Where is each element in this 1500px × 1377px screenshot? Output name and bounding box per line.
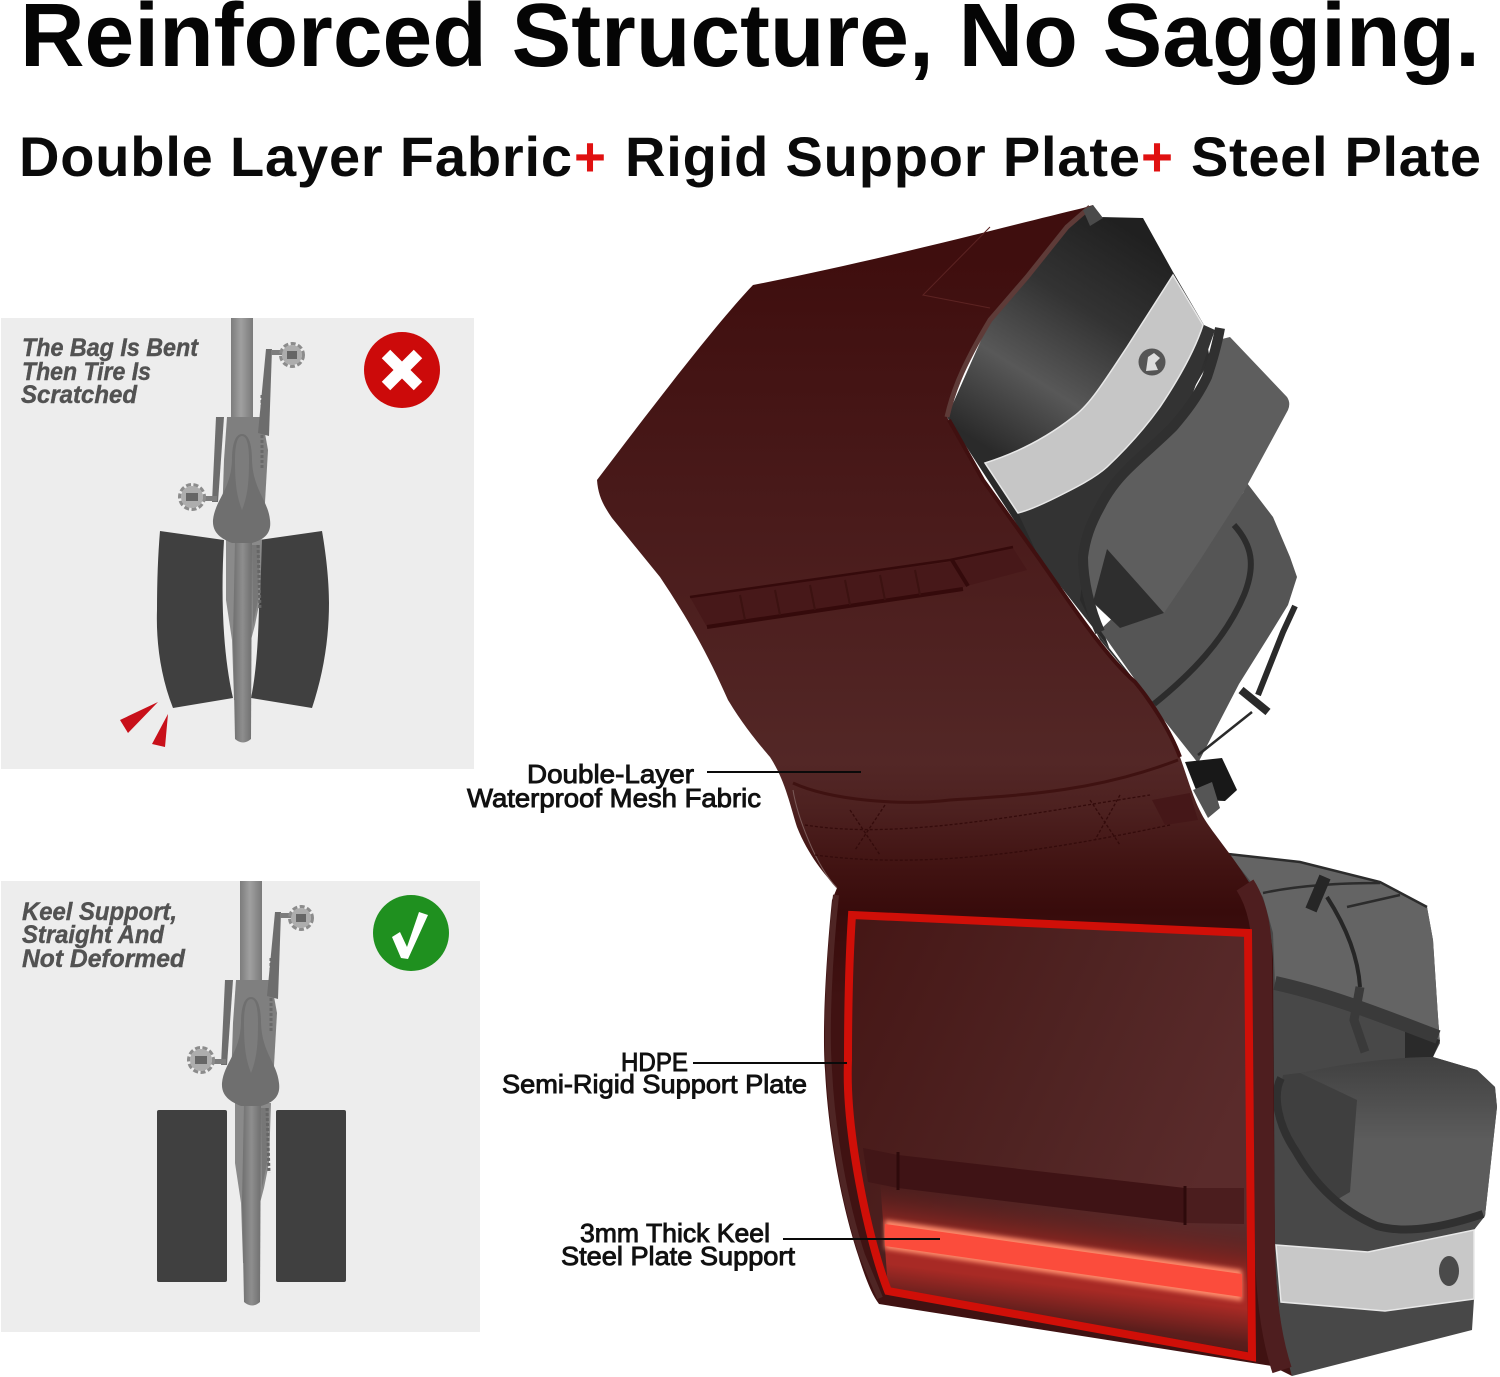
fold tab — [1152, 793, 1198, 825]
drawcord — [1311, 877, 1365, 1052]
pocket piping — [1277, 1078, 1483, 1229]
icon: green check — [373, 895, 449, 971]
caption: keel support: Not Deformed — [22, 945, 186, 973]
buckle and strap — [1185, 758, 1237, 818]
caption: the bag is bent: The Bag Is Bent — [22, 334, 200, 362]
callout: keel steel plate — [561, 1218, 940, 1271]
curved zipper — [1154, 525, 1251, 704]
fold edge highlight — [793, 790, 837, 888]
subtitle: + — [1141, 125, 1173, 188]
lower bag body — [1228, 853, 1497, 1376]
side pocket flap — [1083, 337, 1289, 628]
upper compartment — [1228, 853, 1440, 1043]
steel plate bar — [885, 1220, 1242, 1301]
subtitle: Double Layer Fabric — [19, 125, 572, 188]
callout: double-layer mesh fabric: Double-Layer — [527, 759, 694, 789]
bent pannier bags — [157, 531, 329, 708]
open flap silhouette — [597, 205, 1292, 1376]
reflective strip — [1276, 1230, 1474, 1311]
caption: keel support: Straight And — [22, 921, 165, 949]
callout: HDPE support plate — [502, 1047, 847, 1099]
subtitle: Steel Plate — [1191, 125, 1481, 188]
shadow under band — [1405, 1028, 1440, 1058]
panel: keel support (correct) — [1, 881, 480, 1332]
elastic band — [1275, 983, 1438, 1037]
callout: double-layer mesh fabric: Waterproof Mesh Fabric — [467, 783, 761, 813]
caption: the bag is bent — [21, 334, 200, 409]
front pocket — [1278, 1057, 1497, 1226]
inside of support plate — [848, 915, 1252, 1352]
top seams — [1228, 854, 1427, 907]
bicycle rear view — [180, 318, 304, 742]
flap edge binding — [947, 207, 1090, 417]
grey corner of flap top — [1083, 205, 1103, 226]
lower side fabric — [1100, 483, 1297, 763]
fold shading line — [793, 760, 1178, 802]
lower panel left border — [828, 895, 880, 1298]
body below strip — [1018, 325, 1215, 700]
lower panel right binding — [1245, 885, 1282, 1370]
upper webbing strap — [690, 547, 1027, 627]
bicycle rear view — [188, 881, 312, 1306]
cord and toggle — [1198, 606, 1295, 755]
reflective strip — [985, 275, 1203, 513]
subtitle — [19, 125, 1481, 188]
callout: double-layer mesh fabric — [467, 759, 861, 813]
callout: keel steel plate: 3mm Thick Keel — [580, 1218, 770, 1248]
upper bag body — [947, 205, 1297, 818]
callout: keel steel plate: Steel Plate Support — [561, 1241, 796, 1271]
logo badge — [1138, 348, 1166, 376]
logo badge — [1439, 1256, 1459, 1286]
dark inner pocket — [1093, 549, 1164, 628]
upper flap seam — [923, 227, 990, 308]
callout: HDPE support plate: Semi-Rigid Support Plate — [502, 1069, 807, 1099]
caption: keel support: Keel Support, — [22, 898, 177, 926]
subtitle: Rigid Suppor Plate — [625, 125, 1140, 188]
fold stitching — [805, 795, 1170, 860]
lower flap edge seam — [949, 420, 1180, 757]
caption: the bag is bent: Then Tire Is — [22, 358, 151, 386]
caption: keel support — [22, 898, 186, 973]
steel plate glow — [880, 1180, 1248, 1352]
straight pannier bags — [157, 1110, 346, 1282]
pocket piping — [1083, 328, 1220, 632]
subtitle: + — [574, 125, 606, 188]
product: pannier bag with open flap — [597, 205, 1497, 1376]
callout: HDPE support plate: HDPE — [621, 1047, 688, 1077]
lower webbing strap — [863, 1148, 1244, 1225]
red plate outline — [848, 915, 1252, 1357]
icon: red cross — [364, 332, 440, 408]
caption: the bag is bent: Scratched — [21, 381, 138, 409]
icon: red warning arrows — [120, 702, 168, 747]
panel: bent bag (wrong) — [1, 318, 474, 769]
